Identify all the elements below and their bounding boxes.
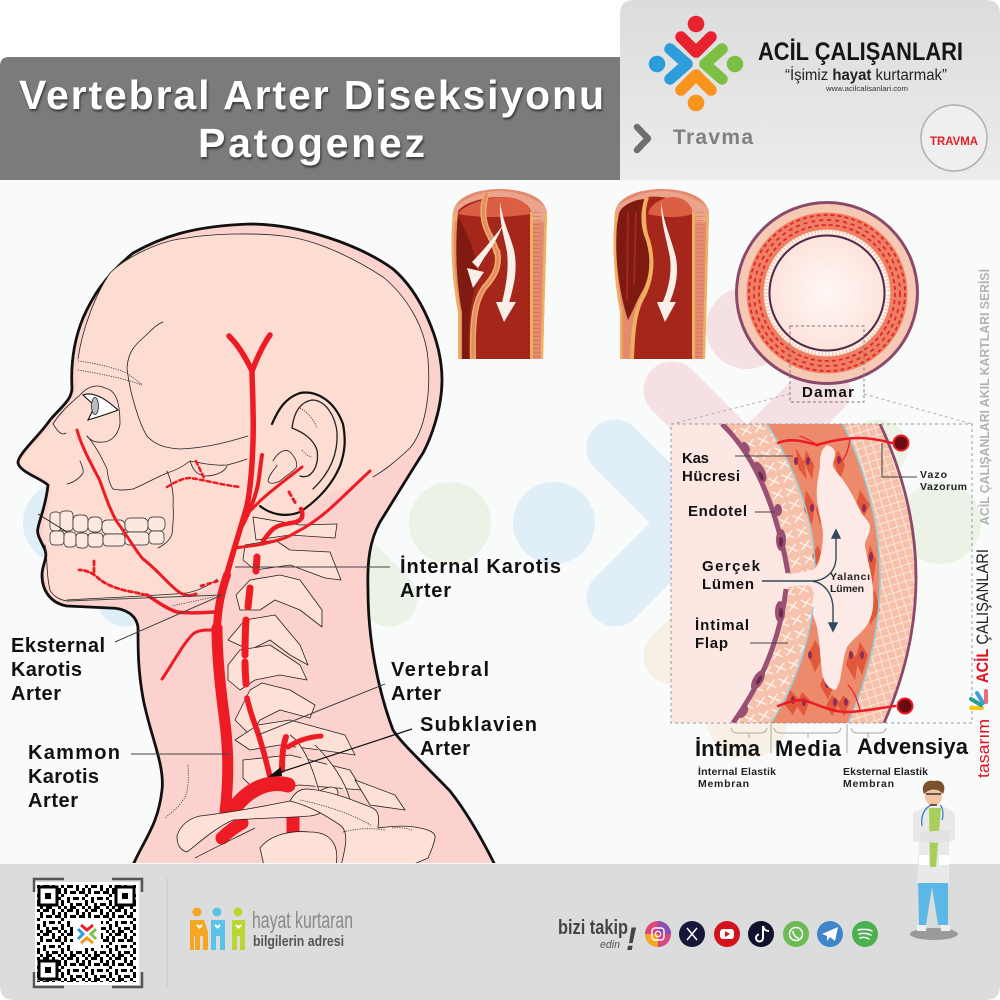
internal carotid — [227, 335, 270, 575]
label: kammon karotis arter — [28, 742, 120, 812]
scrub — [929, 808, 941, 867]
glasses and moustache — [926, 794, 941, 805]
social follow prompt — [558, 917, 637, 957]
label: kas hucresi — [682, 450, 740, 485]
QR logo — [73, 918, 101, 948]
label: vazo vazorum — [920, 469, 967, 493]
outer wall — [452, 189, 547, 359]
label: media: Media — [775, 736, 842, 761]
lumen — [456, 197, 531, 359]
stethoscope — [922, 805, 943, 826]
icon: whatsapp — [783, 921, 809, 947]
label: kammon karotis arter: Arter — [28, 790, 78, 812]
aorta and common carotid — [217, 575, 321, 870]
pointer line: internal karotis — [235, 566, 390, 568]
label: vertebral arter: Vertebral — [391, 659, 489, 681]
label: internal elastik membran: İnternal Elastik — [698, 765, 776, 778]
social follow prompt: ! — [626, 921, 637, 957]
icon: telegram — [817, 921, 843, 947]
magnified wall panel — [671, 424, 972, 723]
label: endotel: Endotel — [688, 503, 747, 520]
crossed arms — [920, 830, 950, 843]
label: intimal flap: Flap — [695, 635, 728, 652]
vertebral artery — [245, 492, 302, 777]
label: internal karotis arter: İnternal Karotis — [400, 555, 561, 578]
wall strips — [692, 212, 695, 359]
right wall strips — [530, 212, 533, 359]
vessel section: dissection with two flows — [452, 189, 547, 359]
hair — [923, 781, 944, 794]
series title vertical: ACİL ÇALIŞANLARI AKIL KARTLARI SERİSİ — [977, 269, 992, 525]
label: internal elastik membran: Membran — [698, 778, 749, 790]
label: kas hucresi: Hücresi — [682, 468, 740, 485]
three people icon — [190, 908, 245, 950]
label: intimal flap: İntimal — [695, 617, 749, 634]
orange left edge — [452, 212, 458, 359]
label: eksternal karotis arter — [11, 635, 105, 705]
tagline bold: bilgilerin adresi — [253, 933, 344, 950]
pointer arrow: subklavien — [268, 729, 412, 777]
brand logo icon — [649, 16, 743, 111]
outer wall line — [880, 424, 916, 723]
label: yalanci lumen — [830, 571, 870, 595]
title line 1: Vertebral Arter Diseksiyonu — [19, 72, 604, 118]
label: intima: İntima — [695, 736, 761, 761]
designer credit vertical: tasarım — [974, 719, 993, 778]
label: eksternal elastik membran — [843, 766, 928, 790]
trousers — [918, 880, 948, 925]
external carotid — [222, 455, 262, 587]
label: yalanci lumen: Yalancı — [830, 571, 870, 583]
ear — [260, 393, 345, 515]
finder patterns — [39, 887, 134, 979]
label: eksternal elastik membran: Membran — [843, 778, 894, 790]
pointer: endotel — [755, 511, 775, 513]
false lumen — [788, 445, 873, 690]
label: damar: Damar — [802, 384, 854, 401]
zoom lines — [672, 394, 972, 424]
tagline light: hayat kurtaran — [252, 907, 353, 933]
intima layer — [722, 424, 815, 723]
teeth — [38, 511, 165, 548]
label: advensiya: Advensiya — [857, 734, 969, 759]
layer brackets — [731, 724, 886, 753]
label: eksternal elastik membran: Eksternal Elastik — [843, 766, 928, 778]
label: kammon karotis arter: Kammon — [28, 742, 120, 764]
pointer: kas hucresi — [735, 455, 793, 457]
brand website: www.acilcalisanlari.com — [825, 86, 908, 93]
cervical vertebrae — [228, 517, 405, 810]
vasa vasorum top — [778, 436, 908, 462]
label: subklavien arter: Arter — [420, 738, 470, 760]
icon: x — [679, 921, 705, 947]
footer divider — [166, 878, 168, 988]
label: vertebral arter — [391, 659, 489, 705]
social follow prompt: edin — [600, 939, 620, 951]
zoom selection box — [790, 326, 864, 402]
shoes — [917, 925, 950, 931]
label: gercek lumen — [702, 558, 761, 593]
muscle cells — [785, 448, 880, 716]
skull details — [45, 322, 248, 606]
adventitia layer — [843, 424, 916, 723]
vessel section: false lumen with thrombus — [614, 189, 709, 359]
facial and other branches — [77, 430, 370, 679]
label: eksternal karotis arter: Karotis — [11, 659, 82, 681]
vessel cross section — [736, 202, 918, 402]
pointer line: eksternal karotis — [67, 595, 222, 642]
face and skull lighter area — [20, 234, 429, 601]
pointer: vazo vazorum — [882, 443, 917, 477]
pointer: intimal flap — [750, 642, 788, 644]
label: intimal flap — [695, 617, 749, 652]
elastic membranes — [767, 424, 815, 723]
flow arrow — [657, 202, 677, 322]
social icons — [645, 921, 878, 947]
eye — [83, 394, 118, 420]
coat — [913, 807, 955, 883]
label: internal elastik membran — [698, 765, 776, 790]
QR code — [34, 879, 142, 987]
arteries — [77, 335, 370, 870]
label: eksternal karotis arter: Eksternal — [11, 635, 105, 657]
flow arrows — [467, 202, 516, 322]
brand name: ACİL ÇALIŞANLARI — [758, 38, 963, 66]
neck thin details — [165, 765, 188, 818]
page background — [0, 180, 1000, 864]
brand header panel — [620, 0, 1000, 180]
dashed panel border — [671, 424, 972, 723]
footer band — [0, 864, 1000, 1000]
media layer — [767, 424, 880, 723]
pointer line: vertebral — [258, 684, 385, 735]
category chevron — [637, 127, 648, 150]
lumen flow arrows — [762, 530, 840, 631]
label: vertebral arter: Arter — [391, 683, 441, 705]
shadow — [910, 928, 958, 940]
brand vertical: ACİL ÇALIŞANLARI — [973, 549, 992, 683]
label: internal karotis arter — [400, 555, 561, 602]
label: subklavien arter: Subklavien — [420, 714, 537, 736]
doctor illustration — [910, 781, 958, 940]
label: vazo vazorum: Vazorum — [920, 481, 967, 493]
label: gercek lumen: Gerçek — [702, 558, 761, 575]
title line 2: Patogenez — [198, 120, 425, 166]
category name: Travma — [673, 126, 753, 149]
label: gercek lumen: Lümen — [702, 576, 754, 593]
label: kas hucresi: Kas — [682, 450, 709, 467]
title banner — [0, 57, 620, 180]
social follow prompt: bizi takip — [558, 917, 628, 939]
intimal flap — [483, 193, 497, 254]
watermark logo — [23, 287, 981, 759]
head silhouette — [18, 224, 495, 865]
brand slogan: “İşimiz hayat kurtarmak” — [785, 66, 947, 84]
small vertical logo — [971, 691, 986, 708]
cranium inner line — [78, 234, 429, 477]
icon: spotify — [852, 921, 878, 947]
hayat kurtaran logo — [190, 907, 353, 950]
label: eksternal karotis arter: Arter — [11, 683, 61, 705]
label: subklavien arter — [420, 714, 537, 760]
icon: instagram — [645, 921, 671, 947]
head — [925, 786, 942, 806]
icon: youtube — [714, 921, 740, 947]
label: yalanci lumen: Lümen — [830, 583, 864, 595]
icon: tiktok — [748, 921, 774, 947]
category badge — [921, 105, 987, 171]
category badge: TRAVMA — [930, 134, 978, 148]
pointer line: kammon karotis — [131, 754, 230, 755]
finder centers — [45, 893, 128, 973]
head and neck anatomy — [18, 224, 495, 870]
clavicle and ribs — [177, 787, 435, 870]
endothelium — [722, 424, 788, 723]
label: vazo vazorum: Vazo — [920, 469, 947, 481]
label: kammon karotis arter: Karotis — [28, 766, 99, 788]
label: internal karotis arter: Arter — [400, 580, 451, 602]
lumen side background — [671, 424, 788, 723]
vasa vasorum bottom — [778, 685, 912, 714]
